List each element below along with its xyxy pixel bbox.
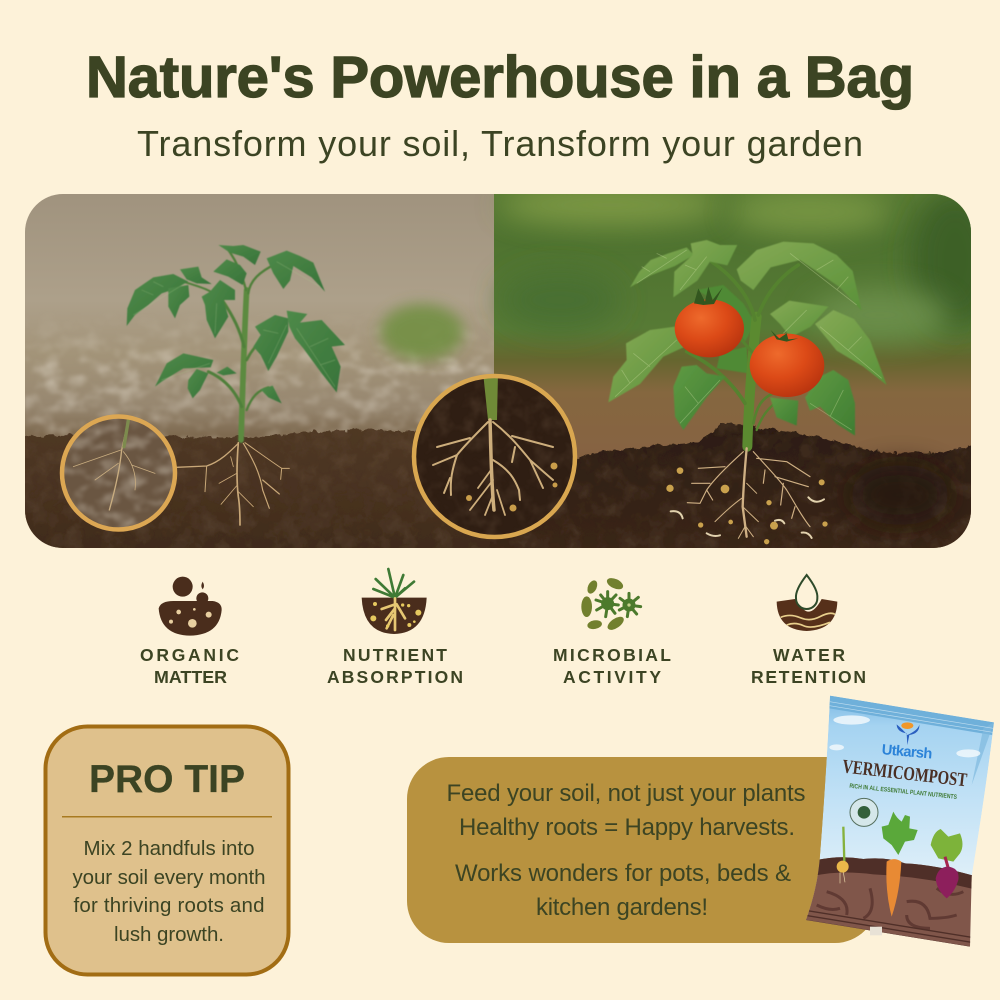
label: microbial activity: MICROBIAL	[553, 645, 671, 665]
tomato right	[750, 330, 824, 397]
panel: enriched soil side	[490, 185, 1000, 552]
bag onion plant	[837, 827, 849, 883]
subtitle: Transform your soil, Transform your garden	[137, 123, 863, 164]
label: water retention: WATER	[773, 645, 845, 665]
label: microbial activity: ACTIVITY	[563, 667, 661, 687]
icon: microbial activity	[581, 576, 641, 633]
bag beetroot plant	[931, 829, 962, 898]
icon: magnified poor roots lens	[60, 415, 178, 531]
panel: depleted soil side	[20, 194, 500, 552]
bag organic badge	[850, 798, 878, 826]
label: water retention: RETENTION	[751, 667, 866, 687]
label: microbial activity	[553, 645, 671, 687]
plant leaf veins	[615, 250, 882, 430]
icon: organic matter	[159, 577, 222, 636]
seedling roots	[177, 443, 289, 525]
seedling leaves	[127, 245, 345, 403]
seedling leaf veins	[133, 262, 335, 387]
pro tip body text: lush growth.	[114, 923, 224, 946]
nutrient particles	[666, 467, 828, 544]
message text: kitchen gardens!	[536, 894, 708, 921]
pro tip body text	[72, 837, 266, 946]
icon: water retention	[777, 575, 837, 631]
bag clouds	[829, 715, 980, 757]
bag carrot plant	[882, 812, 918, 917]
tomato left	[675, 287, 744, 357]
label: organic matter	[140, 645, 239, 687]
icon: small seedling in poor soil	[127, 245, 345, 440]
label: water retention	[751, 645, 866, 687]
plant leaves	[608, 240, 887, 402]
earthworms	[671, 497, 824, 538]
label: organic matter: MATTER	[154, 667, 227, 687]
bag brand name: Utkarsh	[881, 742, 933, 763]
label: nutrient absorption: ABSORPTION	[327, 667, 463, 687]
message text	[446, 780, 806, 921]
panel: soil message	[407, 757, 877, 943]
message text: Healthy roots = Happy harvests.	[459, 814, 795, 841]
panel: pro tip	[46, 726, 288, 974]
message text: Works wonders for pots, beds &	[455, 860, 791, 887]
pro tip body text: for thriving roots and	[74, 894, 264, 917]
panel: before and after plant comparison	[20, 185, 1000, 552]
bag logo	[897, 722, 919, 745]
icon: vermicompost product bag	[800, 696, 994, 952]
message text: Feed your soil, not just your plants	[446, 780, 806, 807]
label: organic matter: ORGANIC	[140, 645, 239, 665]
label: nutrient absorption: NUTRIENT	[343, 645, 447, 665]
bag soil	[800, 857, 973, 952]
back leaves	[697, 285, 755, 373]
icon: magnified healthy roots lens	[414, 372, 575, 537]
label: nutrient absorption	[327, 645, 463, 687]
plant stems	[687, 262, 798, 447]
pro tip body text: your soil every month	[72, 866, 266, 889]
bag tagline: RICH IN ALL ESSENTIAL PLANT NUTRIENTS	[849, 783, 957, 801]
title: Nature's Powerhouse in a Bag	[86, 45, 914, 110]
icon: nutrient absorption	[362, 569, 427, 634]
bag bottom seal	[870, 927, 882, 935]
plant roots	[687, 448, 810, 538]
seedling stems	[183, 250, 277, 440]
pro tip heading: PRO TIP	[89, 758, 245, 801]
icon: healthy tomato plant	[608, 240, 887, 544]
pro tip body text: Mix 2 handfuls into	[84, 837, 254, 860]
